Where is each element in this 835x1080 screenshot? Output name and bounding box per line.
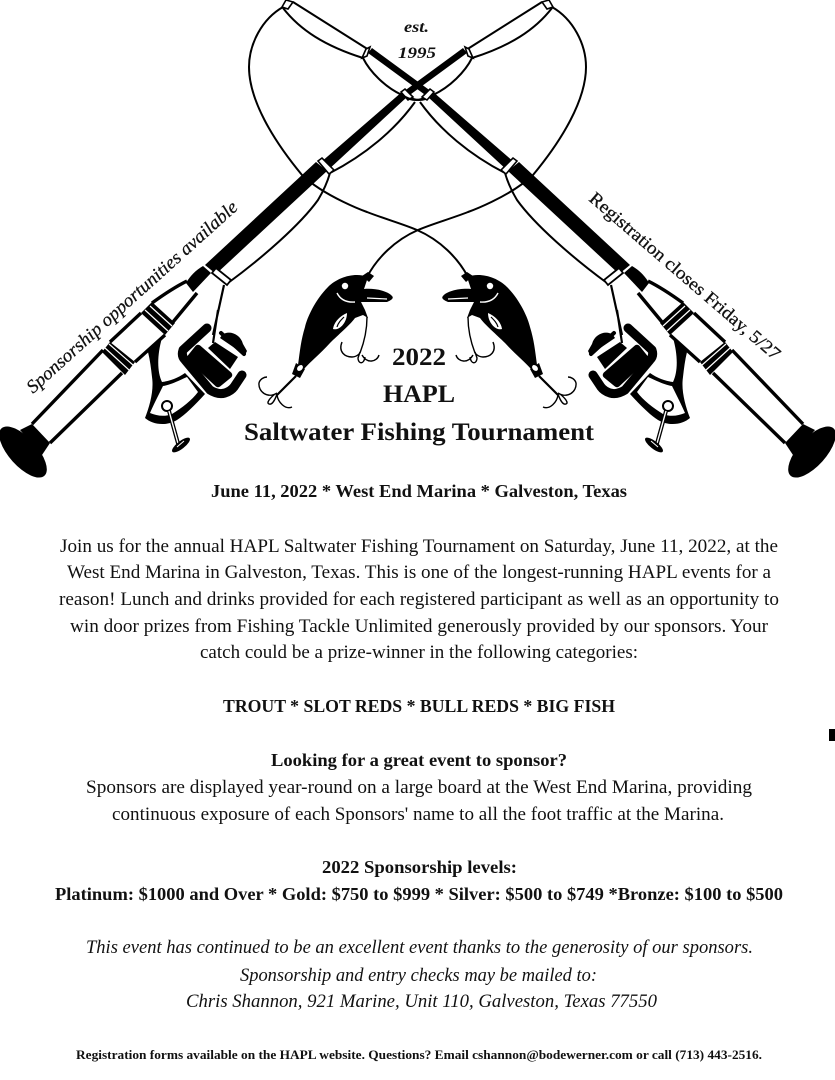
introduction paragraph: West End Marina in Galveston, Texas. This is one of the longest-running HAPL events for a	[67, 563, 771, 583]
sponsor pitch: Looking for a great event to sponsor?	[271, 750, 567, 770]
handle collars	[102, 342, 135, 375]
reel body	[145, 338, 205, 424]
sponsorship levels	[55, 857, 783, 904]
thank you and mailing address: Chris Shannon, 921 Marine, Unit 110, Galveston, Texas 77550	[186, 992, 658, 1012]
reel handle	[162, 401, 172, 411]
introduction paragraph: catch could be a prize-winner in the following categories:	[200, 643, 638, 663]
footer contact line: Registration forms available on the HAPL website. Questions? Email cshannon@bodewerner.com or call (713) 443-2516.	[76, 1047, 762, 1062]
sponsor pitch: Sponsors are displayed year-round on a large board at the West End Marina, providing	[86, 778, 752, 798]
angled note: sponsorship: Sponsorship opportunities available	[23, 198, 242, 398]
edge mark	[829, 729, 835, 741]
sponsorship levels: 2022 Sponsorship levels:	[322, 857, 517, 877]
lure body	[298, 275, 393, 369]
prize categories: TROUT * SLOT REDS * BULL REDS * BIG FISH	[223, 696, 615, 716]
bail arm	[182, 328, 242, 394]
spool	[190, 348, 229, 384]
title: Saltwater Fishing Tournament	[244, 419, 595, 446]
butt cap	[0, 419, 55, 485]
illustration: left fishing rod with reel, line and lure	[0, 0, 586, 485]
foregrip cone	[186, 266, 211, 292]
illustration: right fishing rod with reel, line and lure (mirrored)	[249, 0, 835, 485]
treble hooks	[341, 317, 379, 363]
introduction paragraph: win door prizes from Fishing Tackle Unlimited generously provided by our sponsors. Your	[70, 617, 768, 637]
lure eye	[342, 283, 348, 289]
rod blank	[205, 48, 467, 274]
introduction paragraph: reason! Lunch and drinks provided for each registered participant as well as an opportunity to	[59, 590, 779, 610]
introduction paragraph: Join us for the annual HAPL Saltwater Fishing Tournament on Saturday, June 11, 2022, at the	[60, 537, 778, 557]
sponsor pitch	[86, 750, 752, 825]
spinning reel	[145, 285, 247, 455]
rod handle	[0, 266, 231, 485]
lure	[259, 272, 393, 408]
sponsor pitch: continuous exposure of each Sponsors' name to all the foot traffic at the Marina.	[112, 805, 724, 825]
reel stem	[213, 285, 224, 343]
introduction paragraph	[59, 537, 779, 663]
thank you and mailing address	[86, 938, 753, 1012]
angled note: registration: Registration closes Friday, 5/27	[585, 188, 785, 364]
fishing line loop	[367, 7, 586, 277]
sponsorship levels: Platinum: $1000 and Over * Gold: $750 to $999 * Silver: $500 to $749 *Bronze: $100 to $500	[55, 884, 783, 904]
thank you and mailing address: This event has continued to be an excellent event thanks to the generosity of our sponsors.	[86, 938, 753, 958]
rod guide line	[228, 8, 552, 283]
lure lip highlight	[367, 298, 387, 299]
rod guides	[318, 0, 553, 174]
est. 1995 badge: est.	[404, 19, 429, 36]
est. 1995 badge	[398, 19, 436, 62]
title: 2022	[392, 344, 446, 371]
date and location: June 11, 2022 * West End Marina * Galveston, Texas	[211, 481, 627, 501]
title	[244, 344, 595, 446]
est. 1995 badge: 1995	[398, 45, 436, 62]
lure mouth and gill	[337, 293, 355, 302]
thank you and mailing address: Sponsorship and entry checks may be mailed to:	[240, 966, 597, 986]
tail band and eyelet	[292, 363, 305, 378]
title: HAPL	[383, 381, 455, 408]
